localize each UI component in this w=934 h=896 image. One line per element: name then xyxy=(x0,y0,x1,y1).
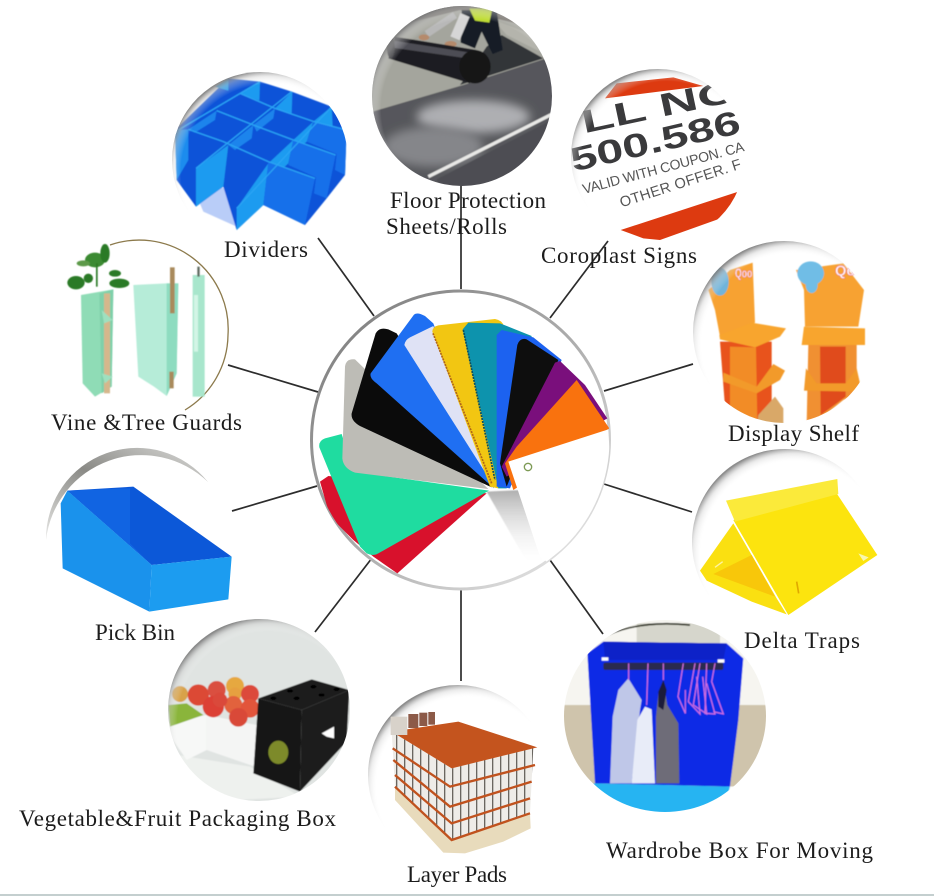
cartoon mascot left xyxy=(711,268,729,296)
garage wall xyxy=(411,6,515,24)
distant building xyxy=(637,623,720,643)
green sheet xyxy=(319,434,489,555)
sign face xyxy=(567,67,747,243)
label: Dividers xyxy=(224,237,308,262)
front light wall right xyxy=(237,163,268,230)
panel: central colour sample fan xyxy=(312,291,612,589)
hanging jacket two xyxy=(632,707,655,783)
mid blue front panels xyxy=(263,162,315,225)
worker legs xyxy=(461,10,503,54)
right stand body xyxy=(807,345,857,423)
grid interior xyxy=(175,78,347,230)
second black sheet xyxy=(500,339,558,487)
line to vegetable and fruit box xyxy=(315,558,372,632)
red sheet xyxy=(320,476,487,573)
photo: blue wardrobe box xyxy=(560,617,770,813)
teal sheet xyxy=(463,323,532,488)
line to delta traps xyxy=(604,484,692,512)
vegetables xyxy=(168,703,203,727)
trap inner panel xyxy=(700,523,787,614)
brand text right: Qoo xyxy=(835,263,864,279)
stacked cans right face xyxy=(452,747,533,840)
bin interior xyxy=(67,487,232,565)
photo: blue pick bin xyxy=(61,487,232,612)
eyelet xyxy=(524,463,532,471)
trap front panel xyxy=(733,493,877,615)
circle outline arc xyxy=(110,240,228,410)
label: Floor Protection xyxy=(390,188,546,213)
right second shelf xyxy=(804,368,860,392)
line to dividers xyxy=(318,238,374,316)
front light wall left xyxy=(196,145,228,207)
label: Wardrobe Box For Moving xyxy=(606,838,874,863)
hanging jacket three xyxy=(656,680,679,783)
grey sheet xyxy=(342,359,488,489)
sign phone number: 500.586 xyxy=(567,104,744,179)
trap slots xyxy=(797,582,799,593)
left lower tray xyxy=(757,397,783,427)
label: Delta Traps xyxy=(744,628,860,653)
outdoor sky xyxy=(560,617,770,717)
white fruit crate xyxy=(207,715,257,767)
photo: orange display stands xyxy=(708,261,865,427)
label: Display Shelf xyxy=(728,421,859,446)
panel: pick bin xyxy=(46,448,232,645)
roll of sheet xyxy=(388,37,477,83)
box round window xyxy=(268,741,288,764)
white base xyxy=(560,787,770,813)
white floor stripe xyxy=(428,113,555,177)
label: Layer Pads xyxy=(407,862,507,887)
brand text left: Qoo xyxy=(735,266,753,280)
hanging bar xyxy=(603,663,723,670)
first guard xyxy=(81,289,113,397)
edge shade xyxy=(372,6,552,186)
box top band xyxy=(603,642,727,660)
black sheet xyxy=(352,329,492,487)
outdoor ground xyxy=(560,705,770,787)
line to layer pads xyxy=(460,588,462,681)
sign small print line one: VALID WITH COUPON. CA xyxy=(581,138,746,197)
panel: delta traps xyxy=(692,449,878,653)
red bottom band xyxy=(621,190,743,240)
bin side xyxy=(61,491,152,612)
worker hands xyxy=(419,34,429,40)
blue sheet xyxy=(370,313,494,488)
panel: layer pads xyxy=(368,685,548,887)
label: Coroplast Signs xyxy=(541,243,697,268)
right top shelf xyxy=(802,327,865,345)
stacked cans left face xyxy=(392,732,452,840)
third guard xyxy=(193,275,205,397)
middle light wall xyxy=(268,140,293,180)
loose cans on top xyxy=(391,712,435,735)
label: Vegetable&Fruit Packaging Box xyxy=(19,806,336,831)
ring background xyxy=(312,291,610,589)
sign small print line two: OTHER OFFER. F xyxy=(618,157,743,211)
hooks xyxy=(602,657,608,661)
table surface xyxy=(167,753,300,803)
panel: dividers xyxy=(172,72,348,262)
edge shade xyxy=(692,449,878,635)
fan shadow xyxy=(486,490,534,542)
panel: display shelf xyxy=(693,241,875,446)
line to display shelf xyxy=(604,364,693,391)
hanging jacket one xyxy=(610,678,642,783)
worker vest xyxy=(469,8,492,23)
yellow sheet flute edge xyxy=(433,333,492,483)
photo: tree guards xyxy=(67,244,205,397)
white sheet xyxy=(404,326,484,472)
second blue sheet xyxy=(497,330,562,488)
concrete floor xyxy=(372,10,544,112)
wooden pallet xyxy=(395,787,531,853)
line to vine and tree guards xyxy=(228,365,318,392)
edge shade xyxy=(172,72,348,248)
panel: floor protection sheets xyxy=(367,3,557,213)
label: sheets rolls: Sheets/Rolls xyxy=(386,214,507,239)
panel: wardrobe box for moving xyxy=(560,617,874,863)
yellow sheet xyxy=(432,319,504,488)
box handle xyxy=(322,727,334,738)
colour sheets fan xyxy=(319,313,612,573)
photo: pallet with layer pads xyxy=(391,712,537,853)
edge shade arc xyxy=(46,448,208,540)
orange sheet xyxy=(505,380,609,490)
bin front xyxy=(149,557,232,612)
backdrop xyxy=(167,617,353,803)
long wall top edges xyxy=(196,92,292,168)
edge shade xyxy=(571,69,745,243)
line to coroplast signs xyxy=(550,241,608,318)
line to pick bin xyxy=(232,486,317,511)
purple sheet xyxy=(502,361,607,477)
unrolled dark sheet xyxy=(374,58,552,183)
right stand back xyxy=(796,263,864,327)
cartoon mascot right xyxy=(797,261,824,285)
left second shelf xyxy=(723,364,785,393)
white sheet with eyelet xyxy=(508,429,612,562)
left edge panel xyxy=(175,129,188,180)
inner light walls xyxy=(228,125,253,150)
second guard stake xyxy=(170,267,175,313)
edge shade xyxy=(693,241,875,423)
cross wall top edges xyxy=(188,129,315,178)
first guard stake xyxy=(104,293,110,393)
sapling leaves xyxy=(67,244,129,289)
sign headline: LL NO xyxy=(578,72,742,140)
photo: printed sign xyxy=(572,77,745,240)
arc at top of photo xyxy=(587,624,690,647)
top pad xyxy=(392,722,537,768)
black box top xyxy=(258,679,349,710)
label: Pick Bin xyxy=(95,620,176,645)
box blue body xyxy=(587,642,743,787)
pink hangers xyxy=(629,663,723,714)
panel: coroplast signs xyxy=(541,67,747,268)
photo: produce boxes xyxy=(167,617,353,803)
panel: vine and tree guards xyxy=(51,240,242,435)
second guard xyxy=(133,283,178,396)
label: Vine &Tree Guards xyxy=(51,410,242,435)
worker sleeves xyxy=(427,15,455,34)
orange layer pads xyxy=(393,748,535,840)
left stand back xyxy=(708,263,755,337)
floor shadow xyxy=(190,180,237,227)
sheen on sheet xyxy=(417,100,530,133)
left stand body xyxy=(720,342,772,422)
bottom rule xyxy=(0,894,934,896)
back spikes xyxy=(215,78,228,91)
edge shade xyxy=(168,619,350,801)
red top band xyxy=(605,77,703,98)
apples xyxy=(172,677,259,727)
teal sheet flute edge xyxy=(463,330,495,480)
connector lines xyxy=(228,185,693,681)
black box front xyxy=(253,698,302,792)
panel: vegetable and fruit packaging box xyxy=(19,617,353,831)
photo: yellow delta trap xyxy=(700,479,877,615)
photo: blue divider grid xyxy=(175,78,347,230)
box holes xyxy=(270,685,340,700)
line to wardrobe box xyxy=(550,560,603,634)
trap top flap xyxy=(726,479,838,522)
left top shelf xyxy=(719,323,786,347)
photo: rolling out a floor sheet xyxy=(367,3,557,190)
line to floor protection xyxy=(460,185,462,289)
cyan box flap xyxy=(593,783,730,813)
edge shade xyxy=(368,685,548,865)
black box side xyxy=(300,690,349,792)
